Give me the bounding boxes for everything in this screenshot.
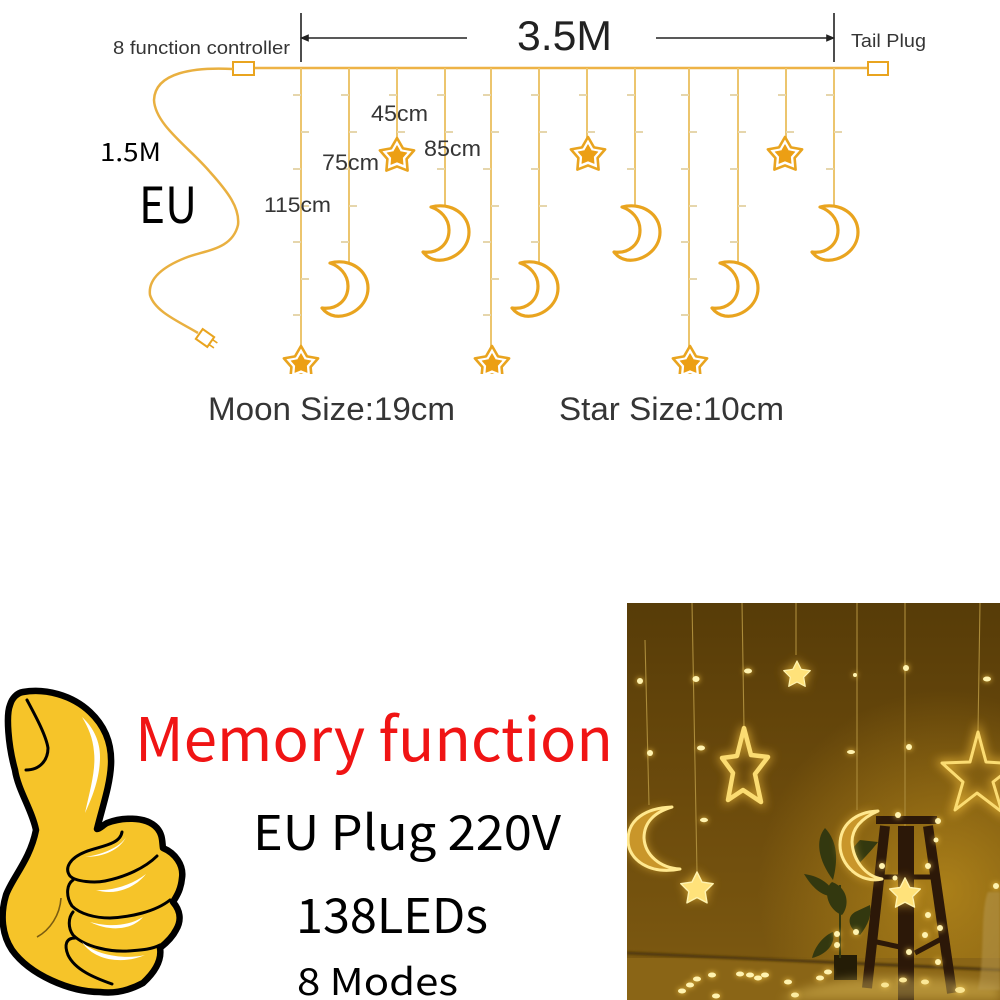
label: 45cm: 45cm bbox=[371, 101, 428, 126]
heading: memory function: Memory function bbox=[135, 692, 613, 779]
text: plug spec: EU Plug 220V bbox=[253, 794, 561, 864]
icon: moons row bbox=[322, 206, 858, 316]
bulb halos bbox=[637, 665, 999, 998]
icon: crescent moons bbox=[628, 807, 882, 880]
white mask clipping bottom stars bbox=[270, 374, 720, 390]
label: tail plug: Tail Plug bbox=[851, 31, 926, 51]
label: moon size: Moon Size:19cm bbox=[208, 391, 455, 427]
icon: plug bbox=[196, 329, 219, 350]
panel: dimension diagram bbox=[100, 12, 926, 427]
icon: thumbs up bbox=[3, 691, 182, 993]
floor bbox=[627, 953, 1000, 1000]
text: led count: 138LEDs bbox=[296, 877, 488, 947]
strings and main wire bbox=[254, 68, 868, 350]
label: total width: 3.5M bbox=[517, 12, 612, 59]
icon: stars row bbox=[284, 137, 802, 379]
icon: filled stars bbox=[681, 661, 920, 907]
photo: lights in room bbox=[627, 603, 1000, 1000]
label: 75cm: 75cm bbox=[322, 150, 379, 175]
icon: hollow stars bbox=[722, 728, 1000, 812]
stool bbox=[867, 820, 952, 1000]
plant bbox=[804, 828, 878, 980]
glow layer bbox=[628, 659, 1000, 908]
icon: controller box bbox=[233, 62, 254, 75]
hanging strings bbox=[645, 603, 980, 880]
dimension arrows bbox=[301, 13, 834, 62]
label: star size: Star Size:10cm bbox=[559, 391, 784, 427]
curtain shape right bbox=[978, 892, 1000, 990]
icon: tail plug box bbox=[868, 62, 888, 75]
power cable bbox=[150, 69, 238, 333]
floor glow bbox=[780, 977, 1000, 1000]
label: 115cm: 115cm bbox=[264, 194, 331, 217]
label: 85cm: 85cm bbox=[424, 136, 481, 161]
label: cable length: 1.5M bbox=[100, 133, 161, 169]
label: controller: 8 function controller bbox=[113, 38, 290, 58]
bulb cores bbox=[637, 665, 999, 998]
label: EU: EU bbox=[139, 166, 197, 238]
